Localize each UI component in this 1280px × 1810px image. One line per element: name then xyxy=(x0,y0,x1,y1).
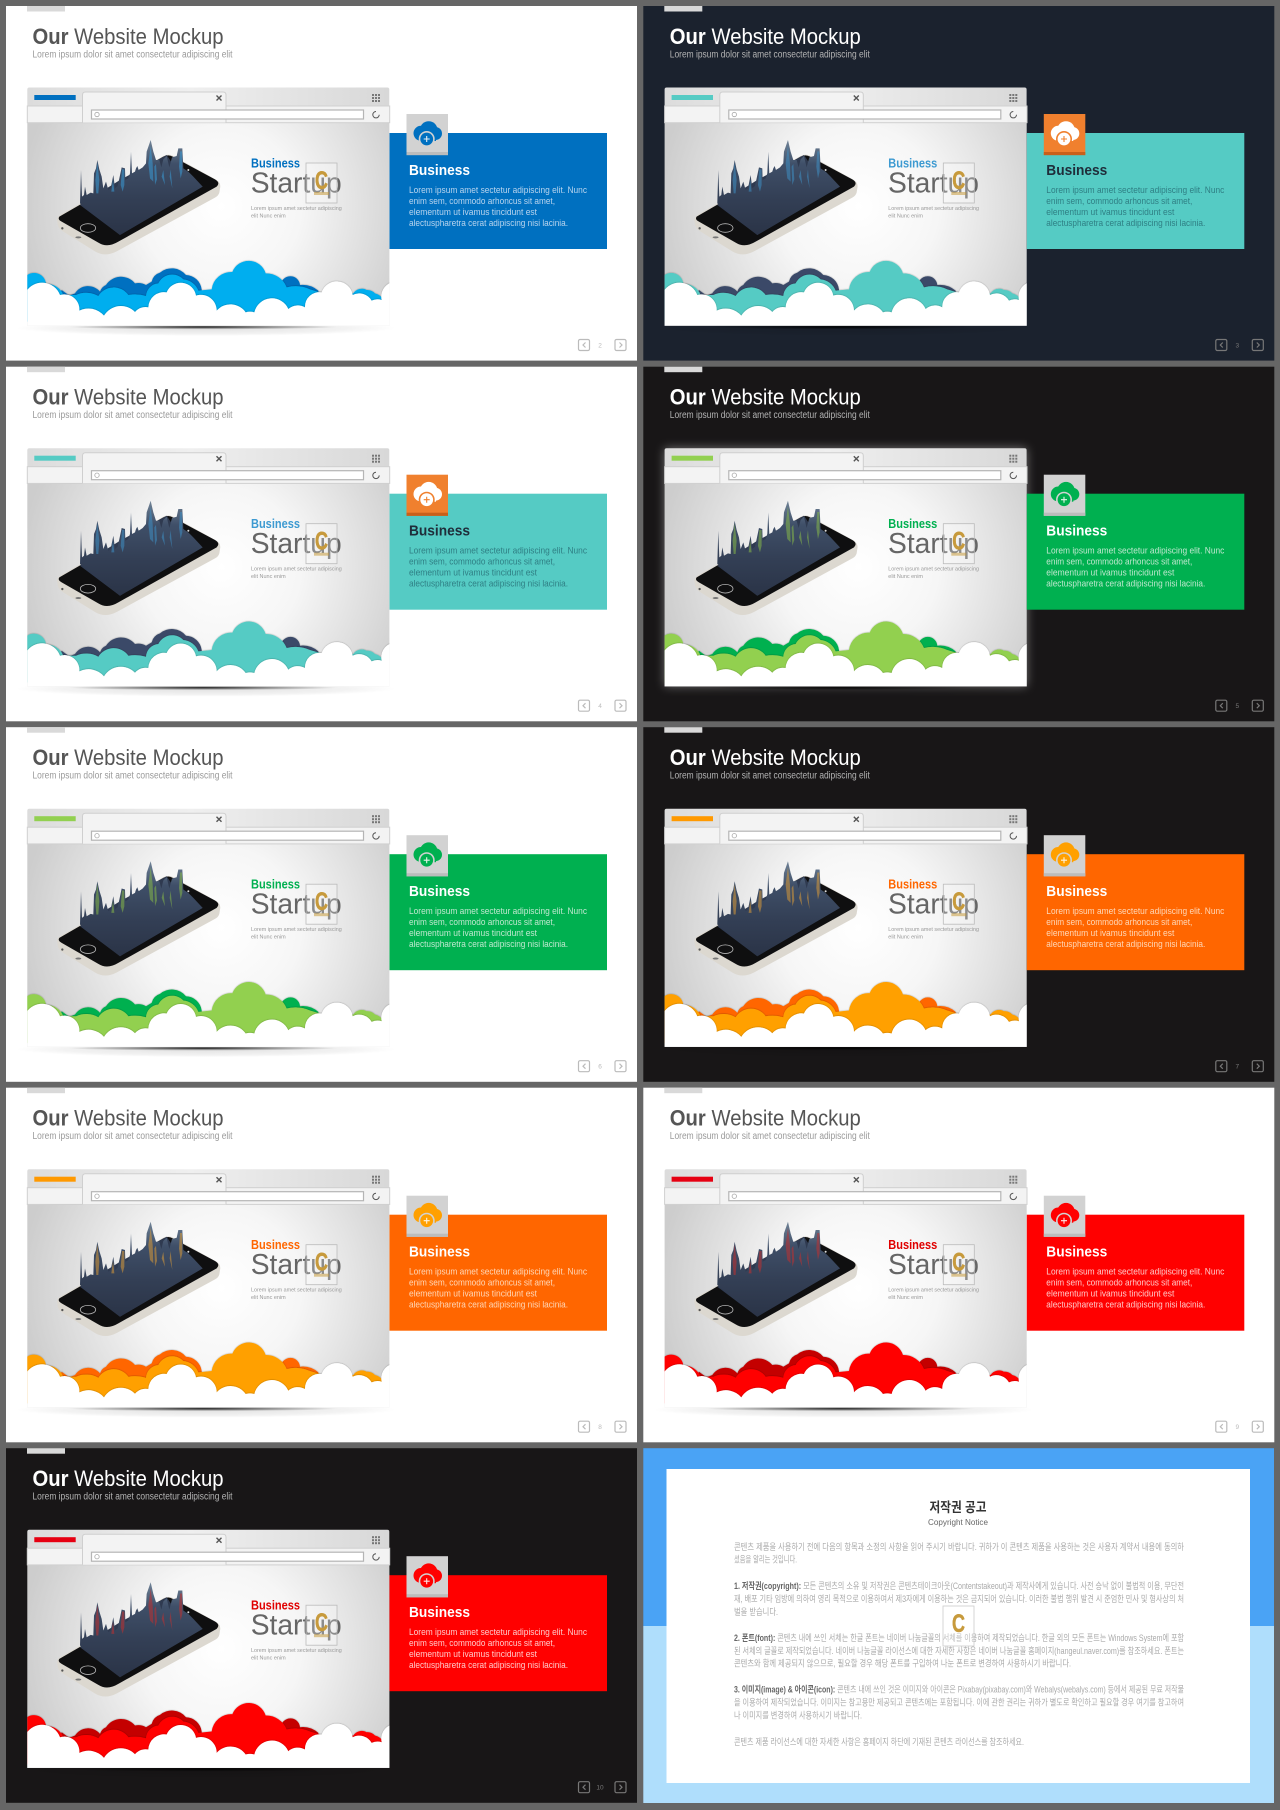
title: Our Website Mockup xyxy=(670,24,861,49)
box text: enim sem, commodo arhoncus sit amet, xyxy=(1046,196,1192,206)
subtitle: Lorem ipsum dolor sit amet consectetur adipiscing elit xyxy=(32,1492,233,1503)
watermark: C xyxy=(315,528,328,556)
pager xyxy=(578,340,626,350)
box text: Business xyxy=(1046,1244,1107,1261)
mockup heading: elit Nunc enim xyxy=(888,214,923,220)
watermark: C xyxy=(952,888,965,916)
panel: teal on white xyxy=(6,367,637,721)
panel: red on black xyxy=(6,1448,637,1803)
pager: 6 xyxy=(598,1064,602,1071)
box text: Business xyxy=(409,1244,470,1261)
title: Our Website Mockup xyxy=(32,745,224,770)
title: Our Website Mockup xyxy=(32,1106,224,1131)
mockup heading: Lorem ipsum amet sectetur adipiscing xyxy=(888,206,979,212)
notice body: 셨음을 알리는 것입니다. xyxy=(734,1554,797,1564)
mockup heading: Business xyxy=(888,878,937,892)
title: Our Website Mockup xyxy=(670,1106,861,1131)
mockup heading: Startup xyxy=(888,1249,979,1281)
mockup heading: elit Nunc enim xyxy=(251,214,286,220)
box text: alectuspharetra cerat adipiscing nisi lacinia. xyxy=(409,218,568,228)
box text: Business xyxy=(1046,162,1107,179)
browser glow xyxy=(665,448,1027,686)
browser mockup with phone and clouds xyxy=(16,448,396,697)
pager: 7 xyxy=(1235,1064,1239,1071)
pager: 4 xyxy=(598,703,602,710)
notice body: 콘텐츠와 함께 제공되지 않으므로, 필요할 경우 해당 폰트를 구입하여 나눈 폰트로 변경하여 사용하시기 바랍니다. xyxy=(734,1658,1071,1668)
box text: elementum ut ivamus tincidunt est xyxy=(1046,1289,1175,1299)
content box xyxy=(390,133,607,249)
box text xyxy=(409,1604,587,1670)
icon: cloud upload xyxy=(406,1196,448,1237)
content box xyxy=(1027,494,1244,610)
box text xyxy=(409,523,587,589)
mockup heading xyxy=(251,1598,342,1662)
watermark: C xyxy=(315,1249,328,1277)
watermark: C xyxy=(315,888,328,916)
box text: alectuspharetra cerat adipiscing nisi lacinia. xyxy=(409,579,568,589)
box text: Lorem ipsum amet sectetur adipiscing elit. Nunc xyxy=(409,1267,587,1277)
box text: Lorem ipsum amet sectetur adipiscing elit. Nunc xyxy=(1046,1267,1225,1277)
icon: cloud upload xyxy=(1044,114,1085,155)
mockup heading: Lorem ipsum amet sectetur adipiscing xyxy=(251,206,342,212)
box text: alectuspharetra cerat adipiscing nisi lacinia. xyxy=(1046,1300,1205,1310)
content box xyxy=(1027,854,1244,970)
panel: teal on navy xyxy=(643,6,1274,361)
box text: Business xyxy=(409,523,470,540)
notice body: 벌을 받습니다. xyxy=(734,1607,778,1617)
icon: cloud upload xyxy=(406,1556,448,1597)
box text: Business xyxy=(409,162,470,179)
pager xyxy=(578,1421,626,1432)
pager: 5 xyxy=(1235,703,1239,710)
icon: cloud upload xyxy=(1044,835,1085,876)
mockup heading: Startup xyxy=(251,1609,342,1641)
mockup heading: Startup xyxy=(888,167,979,199)
title: Our Website Mockup xyxy=(670,385,861,410)
content box xyxy=(390,1575,607,1691)
box text: elementum ut ivamus tincidunt est xyxy=(409,568,537,578)
icon: cloud upload xyxy=(406,835,448,876)
mockup heading xyxy=(888,156,979,220)
mockup heading: elit Nunc enim xyxy=(251,574,286,580)
subtitle: Lorem ipsum dolor sit amet consectetur adipiscing elit xyxy=(32,771,233,782)
subtitle: Lorem ipsum dolor sit amet consectetur adipiscing elit xyxy=(670,410,870,421)
content box xyxy=(390,494,607,610)
box text: elementum ut ivamus tincidunt est xyxy=(1046,207,1175,217)
mockup heading: Lorem ipsum amet sectetur adipiscing xyxy=(888,567,979,573)
panel: red on white xyxy=(643,1088,1274,1442)
mockup heading: Lorem ipsum amet sectetur adipiscing xyxy=(251,1648,342,1654)
browser mockup with phone and clouds xyxy=(16,88,396,336)
panel: blue on white xyxy=(6,6,637,361)
box text: Lorem ipsum amet sectetur adipiscing elit. Nunc xyxy=(409,906,587,916)
box text: Lorem ipsum amet sectetur adipiscing elit. Nunc xyxy=(1046,906,1225,916)
box text xyxy=(1046,523,1225,589)
title: Our Website Mockup xyxy=(32,24,224,49)
box text: Business xyxy=(409,1604,470,1621)
icon: cloud upload xyxy=(406,475,448,516)
pager: 2 xyxy=(598,342,602,350)
mockup heading: elit Nunc enim xyxy=(251,1656,286,1662)
mockup heading: Business xyxy=(251,1598,300,1612)
box text: alectuspharetra cerat adipiscing nisi lacinia. xyxy=(1046,939,1205,949)
mockup heading xyxy=(888,878,979,941)
watermark xyxy=(943,524,974,564)
browser mockup with phone and clouds xyxy=(653,88,1033,336)
subtitle: Lorem ipsum dolor sit amet consectetur adipiscing elit xyxy=(32,50,233,60)
watermark xyxy=(306,884,337,924)
content box xyxy=(1027,1215,1244,1331)
content box xyxy=(390,854,607,970)
box text: alectuspharetra cerat adipiscing nisi lacinia. xyxy=(409,939,568,949)
mockup heading: Startup xyxy=(888,528,979,560)
watermark xyxy=(943,884,974,924)
box text: enim sem, commodo arhoncus sit amet, xyxy=(409,1278,555,1288)
icon: cloud upload xyxy=(1044,1196,1085,1237)
mockup heading xyxy=(251,156,342,220)
pager xyxy=(1216,1421,1263,1432)
mockup heading: Business xyxy=(888,517,937,531)
mockup heading: elit Nunc enim xyxy=(251,1295,286,1301)
panel: copyright notice xyxy=(643,1448,1274,1803)
panel: orange on black xyxy=(643,727,1274,1082)
pager xyxy=(1216,1061,1263,1072)
box text: elementum ut ivamus tincidunt est xyxy=(1046,568,1175,578)
watermark: C xyxy=(315,167,328,195)
mockup heading: Business xyxy=(251,517,300,531)
pager xyxy=(578,1782,626,1793)
box text: enim sem, commodo arhoncus sit amet, xyxy=(1046,1278,1192,1288)
mockup heading: elit Nunc enim xyxy=(888,1295,923,1301)
mockup heading: Startup xyxy=(251,167,342,199)
box text xyxy=(1046,883,1225,949)
notice body: 2. 폰트(font): 콘텐츠 내에 쓰인 서체는 한글 폰트는 네이버 나눔글꼴의 서체를 이용하여 제작되었습니다. 한글 외의 모든 폰트는 Windows System에 포함 xyxy=(734,1632,1184,1643)
watermark: C xyxy=(952,167,965,195)
box text xyxy=(409,883,587,949)
mockup heading: Startup xyxy=(251,889,342,921)
content box xyxy=(390,1215,607,1331)
notice body: 콘텐츠 제품을 사용하기 전에 다음의 항목과 소정의 사항을 읽어 주시기 바랍니다. 귀하가 이 콘텐츠 제품을 사용하는 것은 사용자 계약서 내용에 동의하 xyxy=(734,1541,1185,1552)
mockup heading: Business xyxy=(251,1238,300,1252)
mockup heading: elit Nunc enim xyxy=(251,935,286,941)
box text: Lorem ipsum amet sectetur adipiscing elit. Nunc xyxy=(1046,546,1225,556)
box text: Lorem ipsum amet sectetur adipiscing elit. Nunc xyxy=(409,1627,587,1637)
box text: enim sem, commodo arhoncus sit amet, xyxy=(409,557,555,567)
mockup heading xyxy=(251,517,342,580)
subtitle: Lorem ipsum dolor sit amet consectetur adipiscing elit xyxy=(670,50,870,60)
panel: green on white xyxy=(6,727,637,1082)
box text: alectuspharetra cerat adipiscing nisi lacinia. xyxy=(409,1300,568,1310)
content box xyxy=(1027,133,1244,249)
mockup heading: Business xyxy=(251,156,300,170)
notice body: 콘텐츠 제품 라이선스에 대한 자세한 사항은 홈페이지 하단에 기재된 콘텐츠 라이선스를 참조하세요. xyxy=(734,1736,1024,1747)
subtitle: Lorem ipsum dolor sit amet consectetur adipiscing elit xyxy=(32,410,233,421)
box text: Business xyxy=(1046,523,1107,540)
mockup heading: Lorem ipsum amet sectetur adipiscing xyxy=(888,927,979,933)
box text: enim sem, commodo arhoncus sit amet, xyxy=(409,196,555,206)
mockup heading xyxy=(888,517,979,580)
box text xyxy=(409,1244,587,1310)
browser mockup with phone and clouds xyxy=(16,1530,396,1778)
pager: 8 xyxy=(598,1424,602,1431)
box text: elementum ut ivamus tincidunt est xyxy=(409,928,537,938)
subtitle: Lorem ipsum dolor sit amet consectetur adipiscing elit xyxy=(32,1131,233,1142)
box text: elementum ut ivamus tincidunt est xyxy=(409,207,537,217)
box text: Lorem ipsum amet sectetur adipiscing elit. Nunc xyxy=(409,185,587,195)
mockup heading xyxy=(251,1238,342,1301)
watermark: C xyxy=(952,1610,965,1638)
box text: alectuspharetra cerat adipiscing nisi lacinia. xyxy=(1046,579,1205,589)
mockup heading xyxy=(251,878,342,941)
watermark xyxy=(943,1606,974,1646)
pager xyxy=(1216,700,1263,711)
watermark: C xyxy=(952,528,965,556)
watermark: C xyxy=(315,1609,328,1637)
browser mockup with phone and clouds xyxy=(16,809,396,1057)
watermark xyxy=(306,163,337,203)
mockup heading: Lorem ipsum amet sectetur adipiscing xyxy=(251,927,342,933)
notice body: 3. 이미지(image) & 아이콘(icon): 콘텐츠 내에 쓰인 것은 이미지와 아이콘은 Pixabay(pixabay.com)와 Webalys(webalys.com) 등에서 제공된 무료 저작물 xyxy=(734,1684,1184,1694)
notice heading: 저작권 공고 xyxy=(930,1500,986,1515)
notice subheading: Copyright Notice xyxy=(928,1517,988,1527)
box text: Lorem ipsum amet sectetur adipiscing elit. Nunc xyxy=(409,546,587,556)
title: Our Website Mockup xyxy=(32,385,224,410)
notice body: 나 이미지를 변경하여 사용하시기 바랍니다. xyxy=(734,1710,862,1720)
watermark xyxy=(306,1245,337,1285)
browser mockup with phone and clouds xyxy=(653,448,1033,697)
pager xyxy=(578,1061,626,1072)
mockup heading: Startup xyxy=(251,528,342,560)
box text: Business xyxy=(409,883,470,900)
box text: Business xyxy=(1046,883,1107,900)
mockup heading: Startup xyxy=(888,889,979,921)
box text: Lorem ipsum amet sectetur adipiscing elit. Nunc xyxy=(1046,185,1225,195)
mockup heading: Lorem ipsum amet sectetur adipiscing xyxy=(251,1288,342,1294)
box text: elementum ut ivamus tincidunt est xyxy=(409,1649,537,1659)
browser mockup with phone and clouds xyxy=(653,1169,1033,1418)
box text: enim sem, commodo arhoncus sit amet, xyxy=(1046,557,1192,567)
subtitle: Lorem ipsum dolor sit amet consectetur adipiscing elit xyxy=(670,1131,870,1142)
pager: 10 xyxy=(596,1785,604,1792)
title: Our Website Mockup xyxy=(670,745,861,770)
pager xyxy=(578,700,626,711)
box text: elementum ut ivamus tincidunt est xyxy=(409,1289,537,1299)
box text xyxy=(409,162,587,228)
pager: 9 xyxy=(1235,1424,1239,1431)
watermark xyxy=(306,1605,337,1645)
watermark: C xyxy=(952,1249,965,1277)
watermark xyxy=(306,524,337,564)
subtitle: Lorem ipsum dolor sit amet consectetur adipiscing elit xyxy=(670,771,870,782)
mockup heading: Lorem ipsum amet sectetur adipiscing xyxy=(888,1288,979,1294)
mockup heading: Business xyxy=(888,1238,937,1252)
icon: cloud upload xyxy=(1044,475,1085,516)
browser mockup with phone and clouds xyxy=(653,809,1033,1057)
box text xyxy=(1046,162,1225,228)
mockup heading: Lorem ipsum amet sectetur adipiscing xyxy=(251,567,342,573)
mockup heading xyxy=(888,1238,979,1301)
box text xyxy=(1046,1244,1225,1310)
title: Our Website Mockup xyxy=(32,1466,224,1491)
box text: enim sem, commodo arhoncus sit amet, xyxy=(1046,917,1192,927)
box text: elementum ut ivamus tincidunt est xyxy=(1046,928,1175,938)
notice body xyxy=(734,1541,1185,1747)
mockup heading: Startup xyxy=(251,1249,342,1281)
pager xyxy=(1216,340,1263,350)
browser mockup with phone and clouds xyxy=(16,1169,396,1418)
icon: cloud upload xyxy=(406,114,448,155)
mockup heading: elit Nunc enim xyxy=(888,574,923,580)
mockup heading: Business xyxy=(888,156,937,170)
box text: enim sem, commodo arhoncus sit amet, xyxy=(409,1638,555,1648)
box text: alectuspharetra cerat adipiscing nisi lacinia. xyxy=(1046,218,1205,228)
panel: orange on white xyxy=(6,1088,637,1442)
box text: enim sem, commodo arhoncus sit amet, xyxy=(409,917,555,927)
watermark xyxy=(943,1245,974,1285)
watermark xyxy=(943,163,974,203)
pager: 3 xyxy=(1235,342,1239,350)
panel: green on black xyxy=(643,367,1274,721)
mockup heading: elit Nunc enim xyxy=(888,935,923,941)
mockup heading: Business xyxy=(251,878,300,892)
notice body: 1. 저작권(copyright): 모든 콘텐츠의 소유 및 저작권은 콘텐츠테이크아웃(Contentstakeout)과 제작사에게 있습니다. 사전 승낙 없이 불법적 이용, 무단전 xyxy=(734,1580,1184,1591)
box text: alectuspharetra cerat adipiscing nisi lacinia. xyxy=(409,1660,568,1670)
